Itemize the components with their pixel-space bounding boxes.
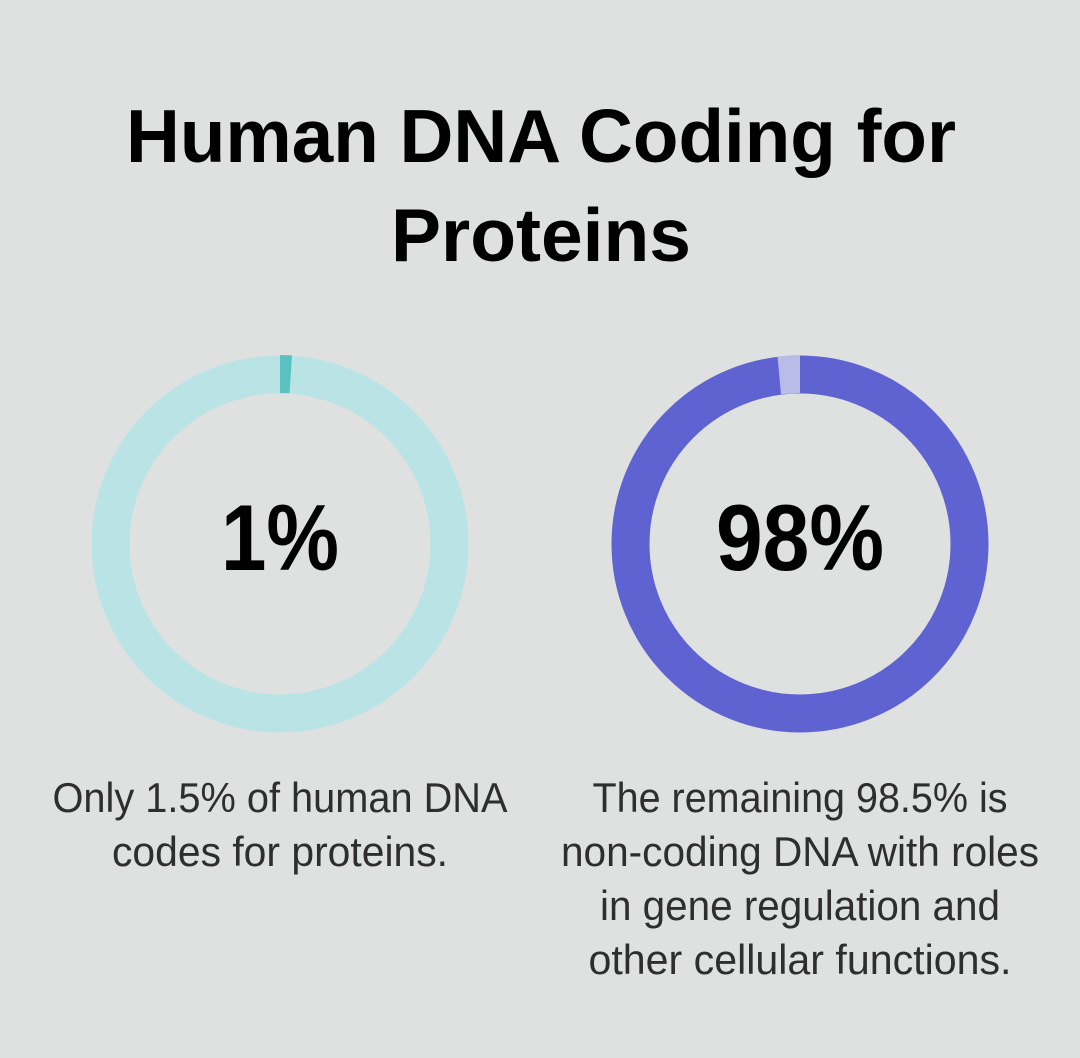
value: 98%: 98%	[716, 485, 884, 590]
description: coding DNA: Only 1.5% of human DNA	[52, 774, 508, 821]
donut chart: 98%	[630, 355, 970, 714]
description: non-coding DNA: other cellular functions.	[588, 936, 1012, 983]
value: 1%: 1%	[221, 485, 339, 590]
description: non-coding DNA: in gene regulation and	[600, 882, 1000, 929]
panel: coding DNA	[52, 355, 508, 875]
panel: non-coding DNA	[561, 355, 1039, 983]
title: Proteins	[391, 193, 691, 277]
title	[126, 94, 956, 277]
donut chart: 1%	[110, 355, 450, 714]
description: non-coding DNA: The remaining 98.5% is	[592, 774, 1008, 821]
description: non-coding DNA: non-coding DNA with roles	[561, 828, 1039, 875]
description: non-coding DNA	[561, 774, 1039, 983]
description: coding DNA	[52, 774, 508, 875]
title: Human DNA Coding for	[126, 94, 956, 178]
description: coding DNA: codes for proteins.	[112, 828, 448, 875]
